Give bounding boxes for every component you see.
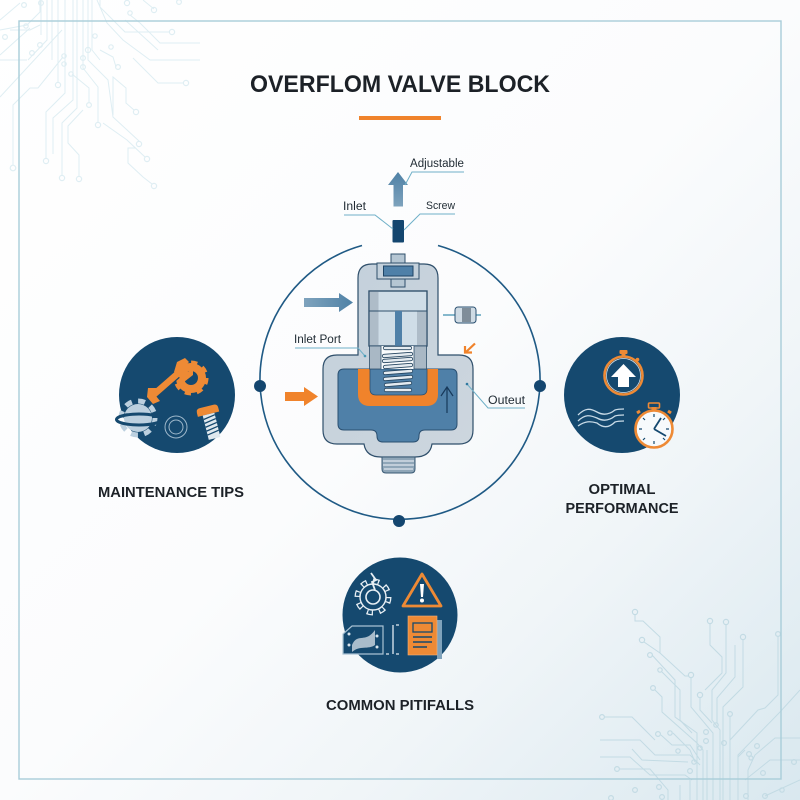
- label: Inlet Port: Inlet Port: [294, 334, 342, 346]
- arrow: blue inlet: [304, 293, 353, 312]
- valve body: [323, 254, 473, 473]
- panel: optimal performance: [564, 337, 680, 517]
- icon: light gear with ring: [116, 401, 162, 435]
- label: OPTIMAL: [588, 482, 656, 498]
- label: Screw: [404, 200, 455, 230]
- label: Outeut: Outeut: [488, 395, 526, 407]
- orbit ring: [260, 246, 540, 519]
- icon: waves: [578, 409, 624, 427]
- icon: orange document: [408, 616, 442, 659]
- icon: wrench: [147, 358, 193, 404]
- icon: orange gear: [176, 363, 206, 393]
- icon: bolt: [196, 404, 225, 441]
- arrow: orange inlet: [285, 387, 318, 406]
- top adjuster cap: [377, 254, 419, 287]
- arrow: up: [388, 172, 408, 206]
- label: MAINTENANCE TIPS: [98, 484, 244, 501]
- label: Adjustable: Adjustable: [410, 158, 464, 170]
- internal flow arrow: [441, 387, 453, 413]
- component: small inline valve: [443, 307, 481, 323]
- inner cup: [370, 369, 427, 395]
- title: OVERFLOM VALVE BLOCK: [250, 71, 550, 98]
- label: Inlet: Inlet: [343, 201, 367, 213]
- ring node: left: [254, 380, 266, 392]
- label: COMMON PITIFALLS: [326, 698, 474, 714]
- badge: [564, 337, 680, 453]
- badge: [119, 337, 235, 453]
- fluid chamber: [338, 369, 457, 442]
- label: Inlet: [343, 201, 393, 229]
- spring chamber walls: [370, 346, 426, 369]
- label: PERFORMANCE: [566, 501, 679, 517]
- orange seat cup: [358, 369, 438, 406]
- ring node: right: [534, 380, 546, 392]
- icon: stopwatch with arrow: [604, 350, 642, 394]
- label: Inlet Port: [294, 334, 366, 357]
- threaded bottom port: [382, 457, 415, 473]
- icon: bracket marks: [386, 625, 399, 654]
- panel: common pitfalls: [326, 558, 474, 714]
- icon: circuit board: [343, 626, 383, 654]
- label: Screw: Screw: [426, 200, 455, 212]
- badge: [342, 558, 458, 672]
- spring: [384, 348, 411, 390]
- adjusting screw block: [392, 220, 404, 242]
- arrow: small orange: [465, 344, 475, 352]
- ring node: bottom: [393, 515, 405, 527]
- panel: maintenance tips: [98, 337, 244, 501]
- diagram: overflow valve block: [254, 158, 546, 527]
- cylinder: [369, 291, 427, 346]
- icon: broken gear: [358, 573, 388, 612]
- label: [566, 482, 679, 517]
- icon: warning triangle: [403, 574, 441, 606]
- title accent bar: [359, 116, 441, 120]
- icon: washer: [165, 416, 187, 438]
- body housing: [323, 264, 473, 457]
- icon: stopwatch clock: [636, 403, 672, 448]
- label: Outeut: [466, 383, 526, 408]
- label: Adjustable: [405, 158, 464, 185]
